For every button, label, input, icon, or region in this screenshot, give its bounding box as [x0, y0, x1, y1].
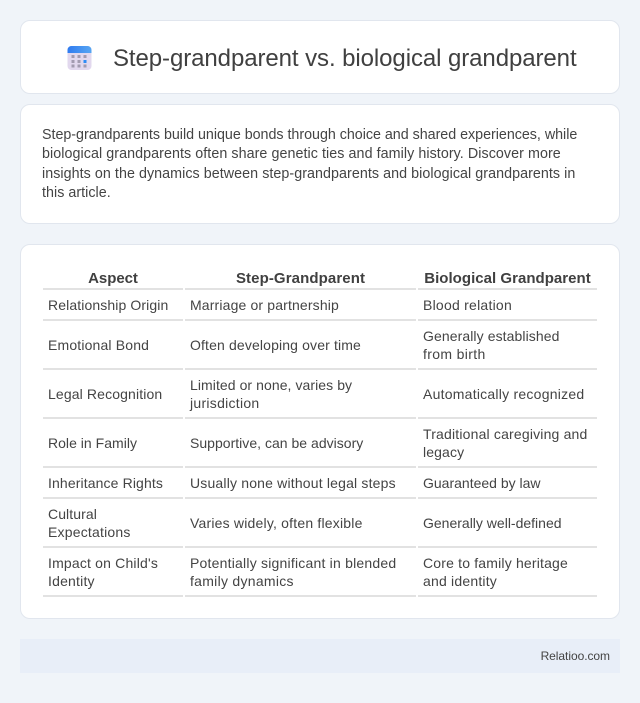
cell: Varies widely, often flexible	[190, 515, 363, 531]
cell: Limited or none, varies by	[190, 377, 352, 393]
cell: legacy	[423, 444, 464, 460]
cell	[423, 328, 560, 362]
text block: introduction: insights on the dynamics between step-grandparents and biological grandparents in	[42, 166, 575, 182]
cell: Traditional caregiving and	[423, 426, 587, 442]
panel: introduction	[20, 104, 620, 224]
row: Impact on Child's Identity: Impact on Child's	[48, 555, 158, 571]
footer credit: Relatioo.com	[541, 649, 610, 663]
cell: Supportive, can be advisory	[190, 435, 363, 451]
row: Cultural Expectations	[48, 506, 131, 540]
column heading: Step-Grandparent: Step-Grandparent	[236, 270, 365, 287]
cell: Potentially significant in blended	[190, 555, 396, 571]
row: Emotional Bond: Emotional Bond	[48, 337, 149, 353]
cell: Guaranteed by law	[423, 475, 541, 491]
row: Legal Recognition: Legal Recognition	[48, 386, 162, 402]
row: Impact on Child's Identity: Identity	[48, 573, 95, 589]
cell: Automatically recognized	[423, 386, 584, 402]
icon: calendar	[68, 46, 92, 70]
panel: title card	[20, 20, 620, 94]
row: Role in Family: Role in Family	[48, 435, 137, 451]
column heading: Biological Grandparent: Biological Grandparent	[424, 270, 591, 287]
cell	[190, 377, 352, 411]
cell: jurisdiction	[190, 395, 260, 411]
cell: Generally established	[423, 328, 560, 344]
footer bar	[20, 639, 620, 673]
cell: Marriage or partnership	[190, 297, 339, 313]
row: Inheritance Rights: Inheritance Rights	[48, 475, 163, 491]
text block: introduction: this article.	[42, 185, 111, 201]
cell: Blood relation	[423, 297, 512, 313]
cell: Generally well-defined	[423, 515, 562, 531]
cell	[190, 555, 396, 589]
cell: from birth	[423, 346, 486, 362]
panel: comparison table	[20, 244, 620, 619]
row: Impact on Child's Identity	[48, 555, 158, 589]
cell	[423, 426, 587, 460]
text block: introduction: biological grandparents often share genetic ties and family history. Discover more	[42, 146, 561, 162]
text block: introduction: Step-grandparents build unique bonds through choice and shared experiences, while	[42, 126, 577, 142]
row: Relationship Origin: Relationship Origin	[48, 297, 168, 313]
title: Step-grandparent vs. biological grandparent	[113, 45, 577, 72]
column heading: Aspect: Aspect	[88, 270, 138, 287]
row: Cultural Expectations: Expectations	[48, 524, 131, 540]
cell: family dynamics	[190, 573, 294, 589]
cell: Usually none without legal steps	[190, 475, 396, 491]
cell	[423, 555, 568, 589]
text block: introduction	[42, 126, 577, 201]
cell: Often developing over time	[190, 337, 361, 353]
cell: Core to family heritage	[423, 555, 568, 571]
row: Cultural Expectations: Cultural	[48, 506, 97, 522]
cell: and identity	[423, 573, 497, 589]
